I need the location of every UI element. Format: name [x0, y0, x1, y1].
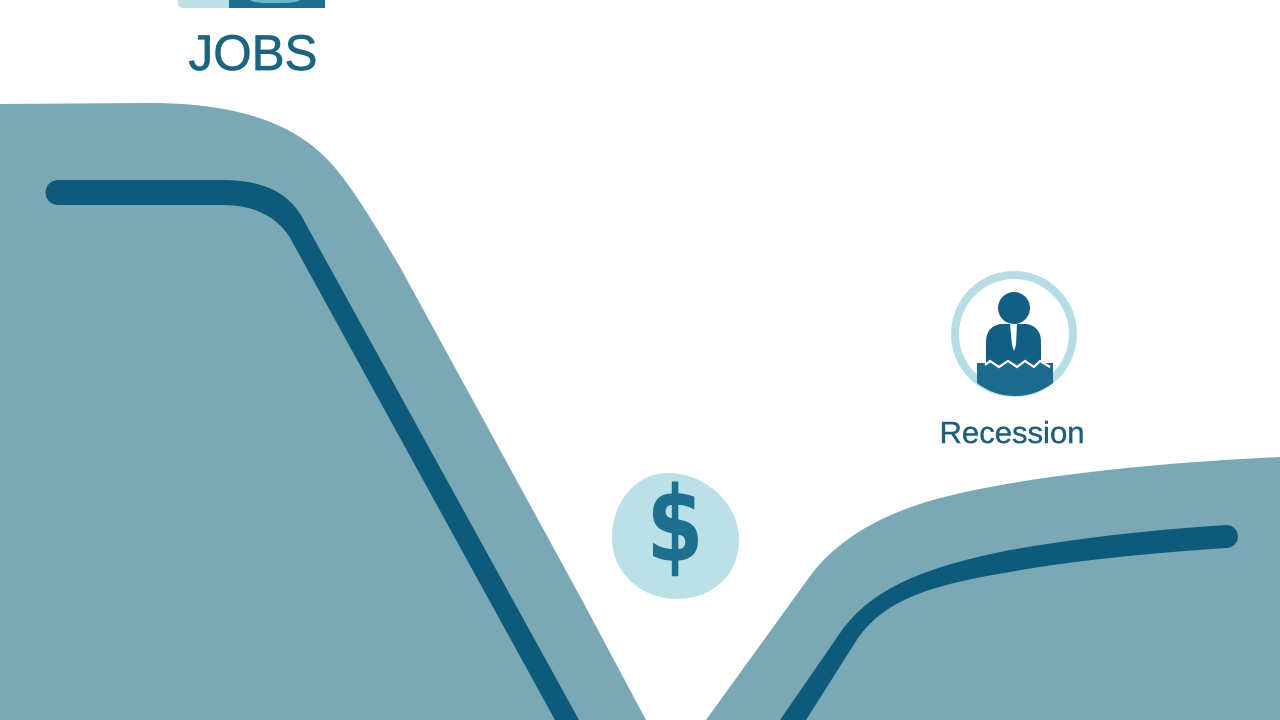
icon: jobs briefcase fragment [178, 0, 325, 8]
area chart: right rising area [706, 457, 1280, 720]
icon: dollar coin: $ [646, 464, 704, 586]
line: rising recovery trend [780, 525, 1238, 720]
line: falling jobs trend [46, 180, 579, 720]
icon: person sinking in recession [955, 275, 1073, 396]
area chart: left falling area [0, 103, 646, 720]
icon: dollar coin [612, 464, 739, 599]
label: Recession: Recession [940, 415, 1084, 450]
heading: JOBS: JOBS [188, 25, 318, 81]
